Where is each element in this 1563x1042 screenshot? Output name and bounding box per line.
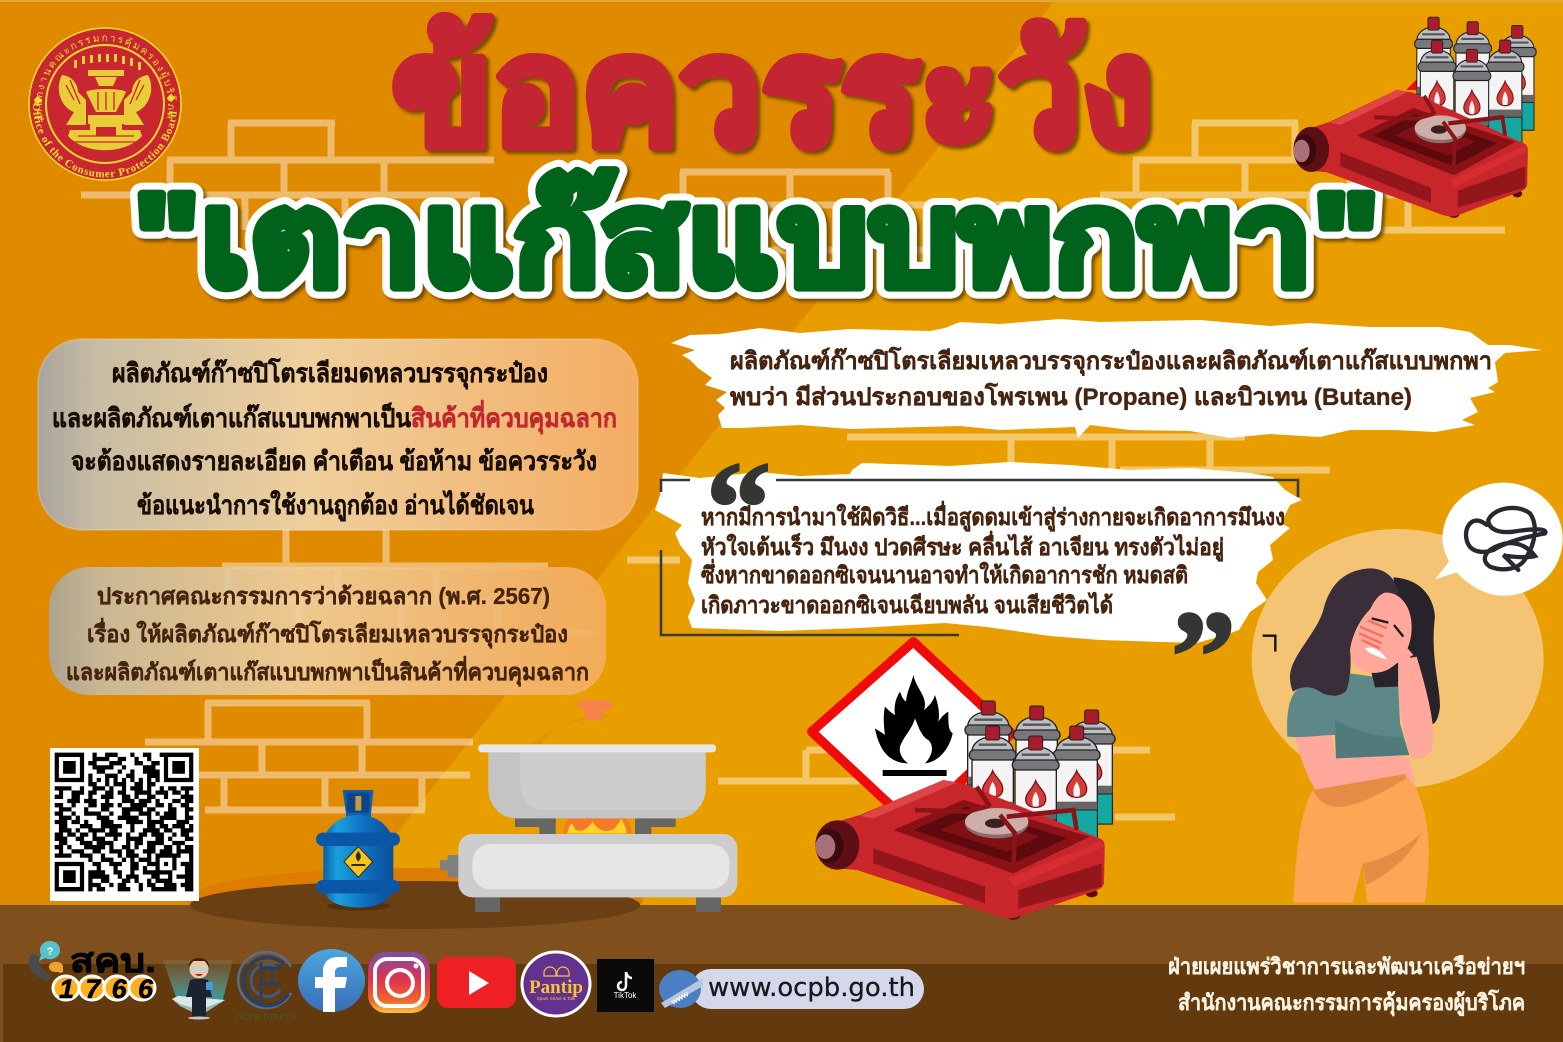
logo: TikTok: [597, 959, 654, 1012]
website pill: www: [669, 989, 691, 1007]
footer credit: ฝ่ายเผยแพร่วิชาการและพัฒนาเครือข่ายฯ: [1168, 954, 1525, 979]
logo: OCPB hotline 1766: [29, 941, 156, 1004]
icon: Instagram: [368, 952, 430, 1013]
logo seal: Office of the Consumer Protection Board: [32, 103, 177, 178]
panel: controlled label notice: [38, 339, 638, 530]
illustration: worried woman: [1252, 529, 1544, 903]
panel: controlled label notice: จะต้องแสดงรายละเอียด คำเตือน ข้อห้าม ข้อควรระวัง: [71, 446, 597, 476]
logo: OCPB Direct: OCPB DIRECT: [235, 1012, 297, 1022]
panel: health warning quote: ”: [1171, 585, 1236, 729]
panel: health warning quote: เกิดภาวะขาดออกซิเจนเฉียบพลัน จนเสียชีวิตได้: [701, 591, 1113, 618]
illustration: blue gas cylinder: [316, 790, 400, 911]
panel: health warning quote: ซึ่งหากขาดออกซิเจนนานอาจทำให้เกิดอาการชัก หมดสติ: [701, 558, 1188, 588]
icon: YouTube: [437, 957, 516, 1008]
panel: controlled label notice: และผลิตภัณฑ์เตาแก๊สแบบพกพาเป็น: [52, 402, 411, 433]
panel: composition brush note: [671, 319, 1542, 438]
panel: health warning quote: หากมีการนำมาใช้ผิดวิธี...เมื่อสูดดมเข้าสู่ร่างกายจะเกิดอาการมึนงง: [701, 500, 1285, 532]
title: portable gas stove: "เตาแก๊สแบบพกพา": [133, 166, 1380, 313]
panel: health warning quote: [655, 436, 1302, 729]
website pill: www.ocpb.go.th: [708, 973, 915, 1003]
logo: OCPB Direct: [235, 952, 297, 1022]
panel: composition brush note: พบว่า มีส่วนประกอบของโพรเพน (Propane) และบิวเทน (Butane): [730, 382, 1412, 411]
logo: TikTok: TikTok: [614, 991, 637, 1000]
panel: announcement: และผลิตภัณฑ์เตาแก๊สแบบพกพาเป็นสินค้าที่ควบคุมฉลาก: [66, 655, 589, 687]
footer credit: [1168, 954, 1525, 1017]
icon: speech bubble with scribble: [1435, 483, 1563, 596]
panel: announcement: ประกาศคณะกรรมการว่าด้วยฉลาก (พ.ศ. 2567): [97, 583, 550, 609]
logo: OCPB hotline 1766: 1766: [59, 974, 154, 1004]
icon: hazard corner (top right): [1406, 78, 1418, 90]
logo seal: [28, 27, 182, 181]
panel: announcement: [49, 567, 606, 695]
logo seal: สำนักงานคณะกรรมการคุ้มครองผู้บริโภค: [34, 36, 177, 120]
panel: announcement: เรื่อง ให้ผลิตภัณฑ์ก๊าซปิโตรเลียมเหลวบรรจุกระป๋อง: [87, 617, 568, 649]
panel: health warning quote: “: [706, 436, 771, 580]
panel: controlled label notice: ผลิตภัณฑ์ก๊าซปิโตรเลียมดหลวบรรจุกระป๋อง: [112, 357, 548, 390]
icon: Facebook: [298, 949, 365, 1012]
website pill: [659, 969, 924, 1009]
illustration: white stove with pot: [440, 700, 737, 912]
logo: OCPB hotline 1766: สคบ.: [70, 942, 156, 979]
panel: composition brush note: ผลิตภัณฑ์ก๊าซปิโตรเลียมเหลวบรรจุกระป๋องและผลิตภัณฑ์เตาแก๊สแบบพกพา: [730, 346, 1492, 377]
QR code: [50, 748, 199, 901]
logo: Pantip: Pantip: [529, 977, 583, 998]
panel: controlled label notice: ข้อแนะนำการใช้งานถูกต้อง อ่านได้ชัดเจน: [137, 489, 534, 522]
icon: presenter character: [163, 958, 233, 1020]
panel: controlled label notice: สินค้าที่ควบคุมฉลาก: [411, 399, 617, 435]
panel: health warning quote: หัวใจเต้นเร็ว มึนงง ปวดศีรษะ คลื่นไส้ อาเจียน ทรงตัวไม่อยู่: [701, 530, 1224, 562]
illustration: portable stove with gas cans (top right): [1293, 17, 1536, 218]
title: portable gas stove: "เตาแก๊สแบบพกพา": [133, 166, 1380, 313]
title: warning: ข้อควรระวัง: [392, 8, 1153, 176]
illustration: portable stove with gas cans (lower): [815, 701, 1115, 920]
icon: flammable hazard diamond: [812, 642, 1012, 827]
logo: Pantip: [522, 952, 590, 1016]
logo: OCPB hotline 1766: ?: [47, 946, 54, 958]
ground: [0, 868, 1563, 1042]
logo: Pantip: Spark Share & Talk: [537, 996, 576, 1001]
footer credit: สำนักงานคณะกรรมการคุ้มครองผู้บริโภค: [1178, 989, 1525, 1017]
